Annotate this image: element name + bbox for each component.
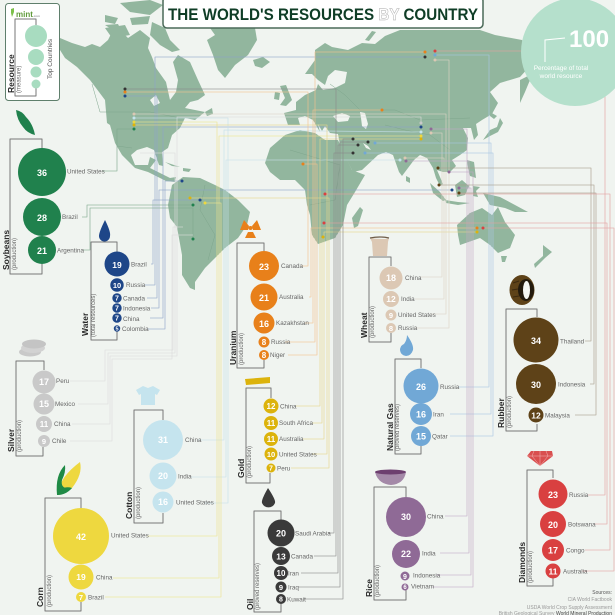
panel: rice: [364, 470, 444, 600]
panel: gold: United States: [279, 452, 317, 458]
panel: oil: 20: [276, 528, 286, 538]
connector lines: rubber: [438, 168, 596, 415]
panel: diamonds: 23: [548, 490, 558, 500]
panel: wheat: 8: [389, 324, 393, 333]
panel: gold: Gold: [236, 459, 246, 478]
panel: rice: 9: [403, 574, 407, 581]
panel: cotton: 31: [158, 435, 168, 445]
panel: silver: China: [54, 421, 71, 428]
panel: rice: 22: [401, 549, 411, 559]
sources: [499, 590, 613, 615]
panel: oil: [245, 488, 331, 612]
panel: diamonds: 11: [548, 566, 558, 576]
panel: rubber: Malaysia: [545, 412, 570, 420]
panel: natural gas: [385, 335, 460, 454]
title: [163, 0, 483, 28]
panel: rubber: (production): [507, 396, 513, 428]
connector lines: water: [125, 57, 452, 329]
panel: wheat: 18: [386, 273, 396, 283]
panel: soybeans: 36: [37, 168, 47, 178]
panel: diamonds: Australia: [563, 568, 588, 576]
panel: oil: Iran: [288, 570, 299, 578]
icon: gas flame: [400, 335, 413, 356]
panel: uranium: [228, 220, 309, 368]
panel: cotton: [124, 386, 214, 523]
icon: oil drop: [262, 488, 275, 507]
icon: t-shirt: [136, 386, 160, 405]
panel: water: Colombia: [122, 326, 149, 333]
scale key: 100 percent circle: [521, 0, 615, 106]
panel: wheat: Wheat: [359, 312, 369, 338]
panel: diamonds: 20: [548, 520, 558, 530]
panel: oil: (proved reserves): [255, 563, 261, 610]
panel: water: Brazil: [131, 262, 147, 268]
icon: corn cob: [59, 462, 81, 493]
panel: oil: 10: [277, 569, 286, 578]
scale key: 100 percent circle: Percentage of total: [534, 65, 589, 72]
panel: oil: Iraq: [288, 584, 299, 592]
panel: uranium: Kazakhstan: [276, 320, 309, 327]
panel: wheat: China: [405, 275, 422, 282]
panel: natural gas: 26: [416, 382, 426, 392]
panel: rubber: 34: [531, 336, 541, 346]
panel: water: Canada: [123, 296, 146, 302]
panel: rice: China: [427, 514, 444, 520]
panel: rice: India: [422, 550, 436, 558]
panel: wheat: United States: [398, 312, 436, 319]
panel: oil: Saudi Arabia: [295, 530, 331, 538]
panel: uranium: (production): [239, 333, 245, 365]
connector lines: rice: [406, 129, 473, 587]
connector lines: natural gas: [365, 55, 493, 436]
panel: soybeans: 21: [37, 246, 47, 256]
panel: natural gas: Iran: [433, 412, 444, 418]
panel: cotton: United States: [176, 500, 214, 506]
icon: gold bar: [245, 377, 270, 385]
panel: water: 7: [115, 296, 119, 302]
panel: corn: 42: [76, 532, 86, 542]
panel: soybeans: Brazil: [62, 214, 78, 221]
panel: cotton: China: [185, 437, 202, 444]
panel: gold: China: [280, 404, 297, 410]
panel: gold: [236, 377, 317, 483]
panel: water: Indonesia: [123, 306, 151, 312]
panel: water: China: [123, 316, 140, 323]
icon: diamond: [527, 451, 553, 466]
panel: cotton: India: [178, 474, 192, 480]
panel: silver: (production): [17, 420, 23, 452]
icon: water drop: [99, 220, 110, 242]
legend panel: Top Countries: [47, 38, 54, 79]
panel: oil: Oil: [245, 599, 255, 610]
sources: CIA World Factbook: [568, 597, 612, 603]
panel: rubber: Rubber: [496, 398, 506, 428]
panel: wheat: (production): [370, 306, 376, 338]
icon: rice bowl: [375, 470, 406, 485]
panel: diamonds: Congo: [566, 548, 585, 554]
panel: gold: 11: [267, 419, 276, 428]
country location dots: [124, 50, 484, 240]
icon: soybean pod: [16, 110, 35, 135]
panel: water: Water: [80, 312, 90, 336]
panel: silver: Chile: [52, 438, 67, 445]
panel: uranium: Canada: [281, 263, 304, 270]
panel: gold: 12: [267, 402, 276, 411]
panel: rice: 6: [403, 585, 407, 591]
panel: silver: 17: [39, 377, 49, 387]
panel: corn: United States: [111, 532, 149, 540]
panel: corn: Corn: [35, 587, 45, 607]
panel: uranium: 21: [259, 293, 269, 303]
panel: rice: 30: [401, 512, 411, 522]
panel: soybeans: 28: [37, 213, 47, 223]
connector lines: uranium: [125, 52, 477, 355]
panel: silver: Peru: [56, 378, 70, 385]
panel: oil: Kuwait: [287, 596, 306, 604]
panel: corn: (production): [47, 575, 53, 607]
panel: uranium: 8: [262, 338, 267, 347]
panel: silver: Mexico: [55, 401, 75, 408]
panel: cotton: Cotton: [124, 492, 134, 519]
title: THE WORLD'S RESOURCES BY COUNTRY: [168, 5, 479, 24]
panel: silver: Silver: [6, 428, 16, 452]
scale key: 100 percent circle: world resource: [539, 73, 583, 80]
icon: bread loaf: [370, 238, 389, 256]
panel: soybeans: Soybeans: [1, 230, 11, 270]
legend panel: Resource: [6, 54, 16, 93]
panel: rubber: 12: [531, 410, 541, 420]
panel: diamonds: [517, 451, 596, 586]
panel: uranium: Niger: [270, 352, 285, 359]
panel: rubber: [496, 275, 586, 431]
panel: silver: 11: [40, 420, 49, 429]
panel: cotton: 20: [158, 471, 168, 481]
panel: silver: [6, 340, 75, 456]
panel: natural gas: Natural Gas: [385, 403, 395, 451]
connector lines: soybeans: [82, 129, 193, 250]
panel: corn: [35, 462, 149, 611]
country borders: [92, 84, 470, 260]
panel: wheat: India: [401, 296, 415, 303]
panel: gold: Australia: [279, 436, 304, 443]
panel: corn: 19: [76, 572, 86, 582]
panel: soybeans: [1, 110, 105, 274]
panel: rice: Indonesia: [413, 572, 441, 580]
panel: diamonds: (production): [528, 551, 534, 583]
panel: gold: South Africa: [279, 420, 313, 427]
panel: uranium: Australia: [279, 294, 304, 301]
panel: water: 10: [113, 281, 121, 290]
panel: soybeans: (production): [12, 238, 18, 270]
sources: USDA World Crop Supply Assessment: [527, 605, 613, 611]
panel: natural gas: (proved reserves): [395, 404, 401, 451]
panel: cotton: (production): [136, 487, 142, 519]
icon: radiation symbol: [240, 220, 261, 238]
panel: water: Russia: [126, 282, 146, 289]
panel: natural gas: Qatar: [432, 434, 448, 440]
panel: diamonds: Botswana: [568, 522, 596, 528]
panel: water: [80, 220, 151, 340]
panel: corn: 7: [79, 593, 83, 602]
panel: uranium: Russia: [271, 339, 291, 346]
panel: water: 7: [115, 316, 119, 322]
panel: wheat: 12: [386, 294, 396, 304]
panel: wheat: [359, 237, 436, 342]
panel: gold: Peru: [277, 466, 291, 472]
panel: gold: 10: [267, 450, 275, 459]
panel: rice: Rice: [364, 579, 374, 597]
inland seas: [150, 95, 371, 150]
panel: diamonds: Russia: [569, 492, 589, 499]
panel: gold: 7: [269, 466, 273, 472]
panel: corn: China: [96, 574, 113, 582]
panel: rubber: Thailand: [560, 338, 585, 346]
panel: soybeans: Argentina: [57, 248, 84, 254]
panel: water: (total resources): [91, 294, 97, 337]
icon: tire: [510, 275, 534, 305]
panel: oil: 8: [279, 596, 283, 604]
panel: rice: Vietnam: [411, 584, 434, 590]
panel: water: 5: [115, 326, 119, 332]
world map: [60, 0, 552, 290]
connector lines: diamonds: [324, 51, 614, 571]
panel: wheat: Russia: [398, 325, 418, 332]
connector lines: gold: [134, 125, 477, 468]
connector lines: silver: [70, 117, 421, 441]
panel: uranium: Uranium: [228, 330, 238, 365]
legend panel: [6, 4, 60, 100]
panel: rubber: Indonesia: [558, 382, 586, 388]
panel: water: 7: [115, 306, 119, 312]
panel: silver: 9: [42, 437, 46, 446]
panel: silver: 15: [39, 399, 49, 409]
panel: uranium: 8: [262, 351, 267, 360]
sources: Sources:: [592, 590, 612, 596]
panel: diamonds: Diamonds: [517, 542, 527, 583]
panel: oil: 9: [279, 583, 283, 592]
panel: corn: Brazil: [88, 594, 104, 602]
panel: cotton: 16: [158, 497, 168, 507]
panel: gold: (production): [247, 446, 253, 478]
panel: rice: (production): [375, 565, 381, 597]
connector lines: oil: [124, 89, 368, 599]
panel: gold: 11: [267, 435, 276, 444]
panel: diamonds: 17: [548, 546, 558, 556]
panel: soybeans: United States: [67, 168, 105, 176]
panel: natural gas: 15: [416, 432, 426, 442]
connector lines: wheat: [134, 60, 449, 328]
panel: water: 19: [112, 260, 122, 270]
panel: rubber: 30: [531, 380, 541, 390]
panel: uranium: 23: [259, 262, 269, 272]
panel: oil: Canada: [291, 554, 314, 560]
panel: wheat: 9: [389, 311, 393, 320]
panel: natural gas: Russia: [440, 384, 460, 391]
connector lines: cotton: [134, 118, 421, 503]
panel: natural gas: 16: [416, 410, 426, 420]
scale key: 100 percent circle: 100: [569, 26, 609, 53]
legend panel: (measure): [16, 66, 22, 93]
panel: uranium: 16: [259, 319, 269, 329]
icon: silver coins: [19, 348, 41, 356]
mint logo: mint.com: [16, 10, 40, 19]
panel: oil: 13: [276, 552, 286, 562]
connector lines: corn: [105, 122, 421, 597]
